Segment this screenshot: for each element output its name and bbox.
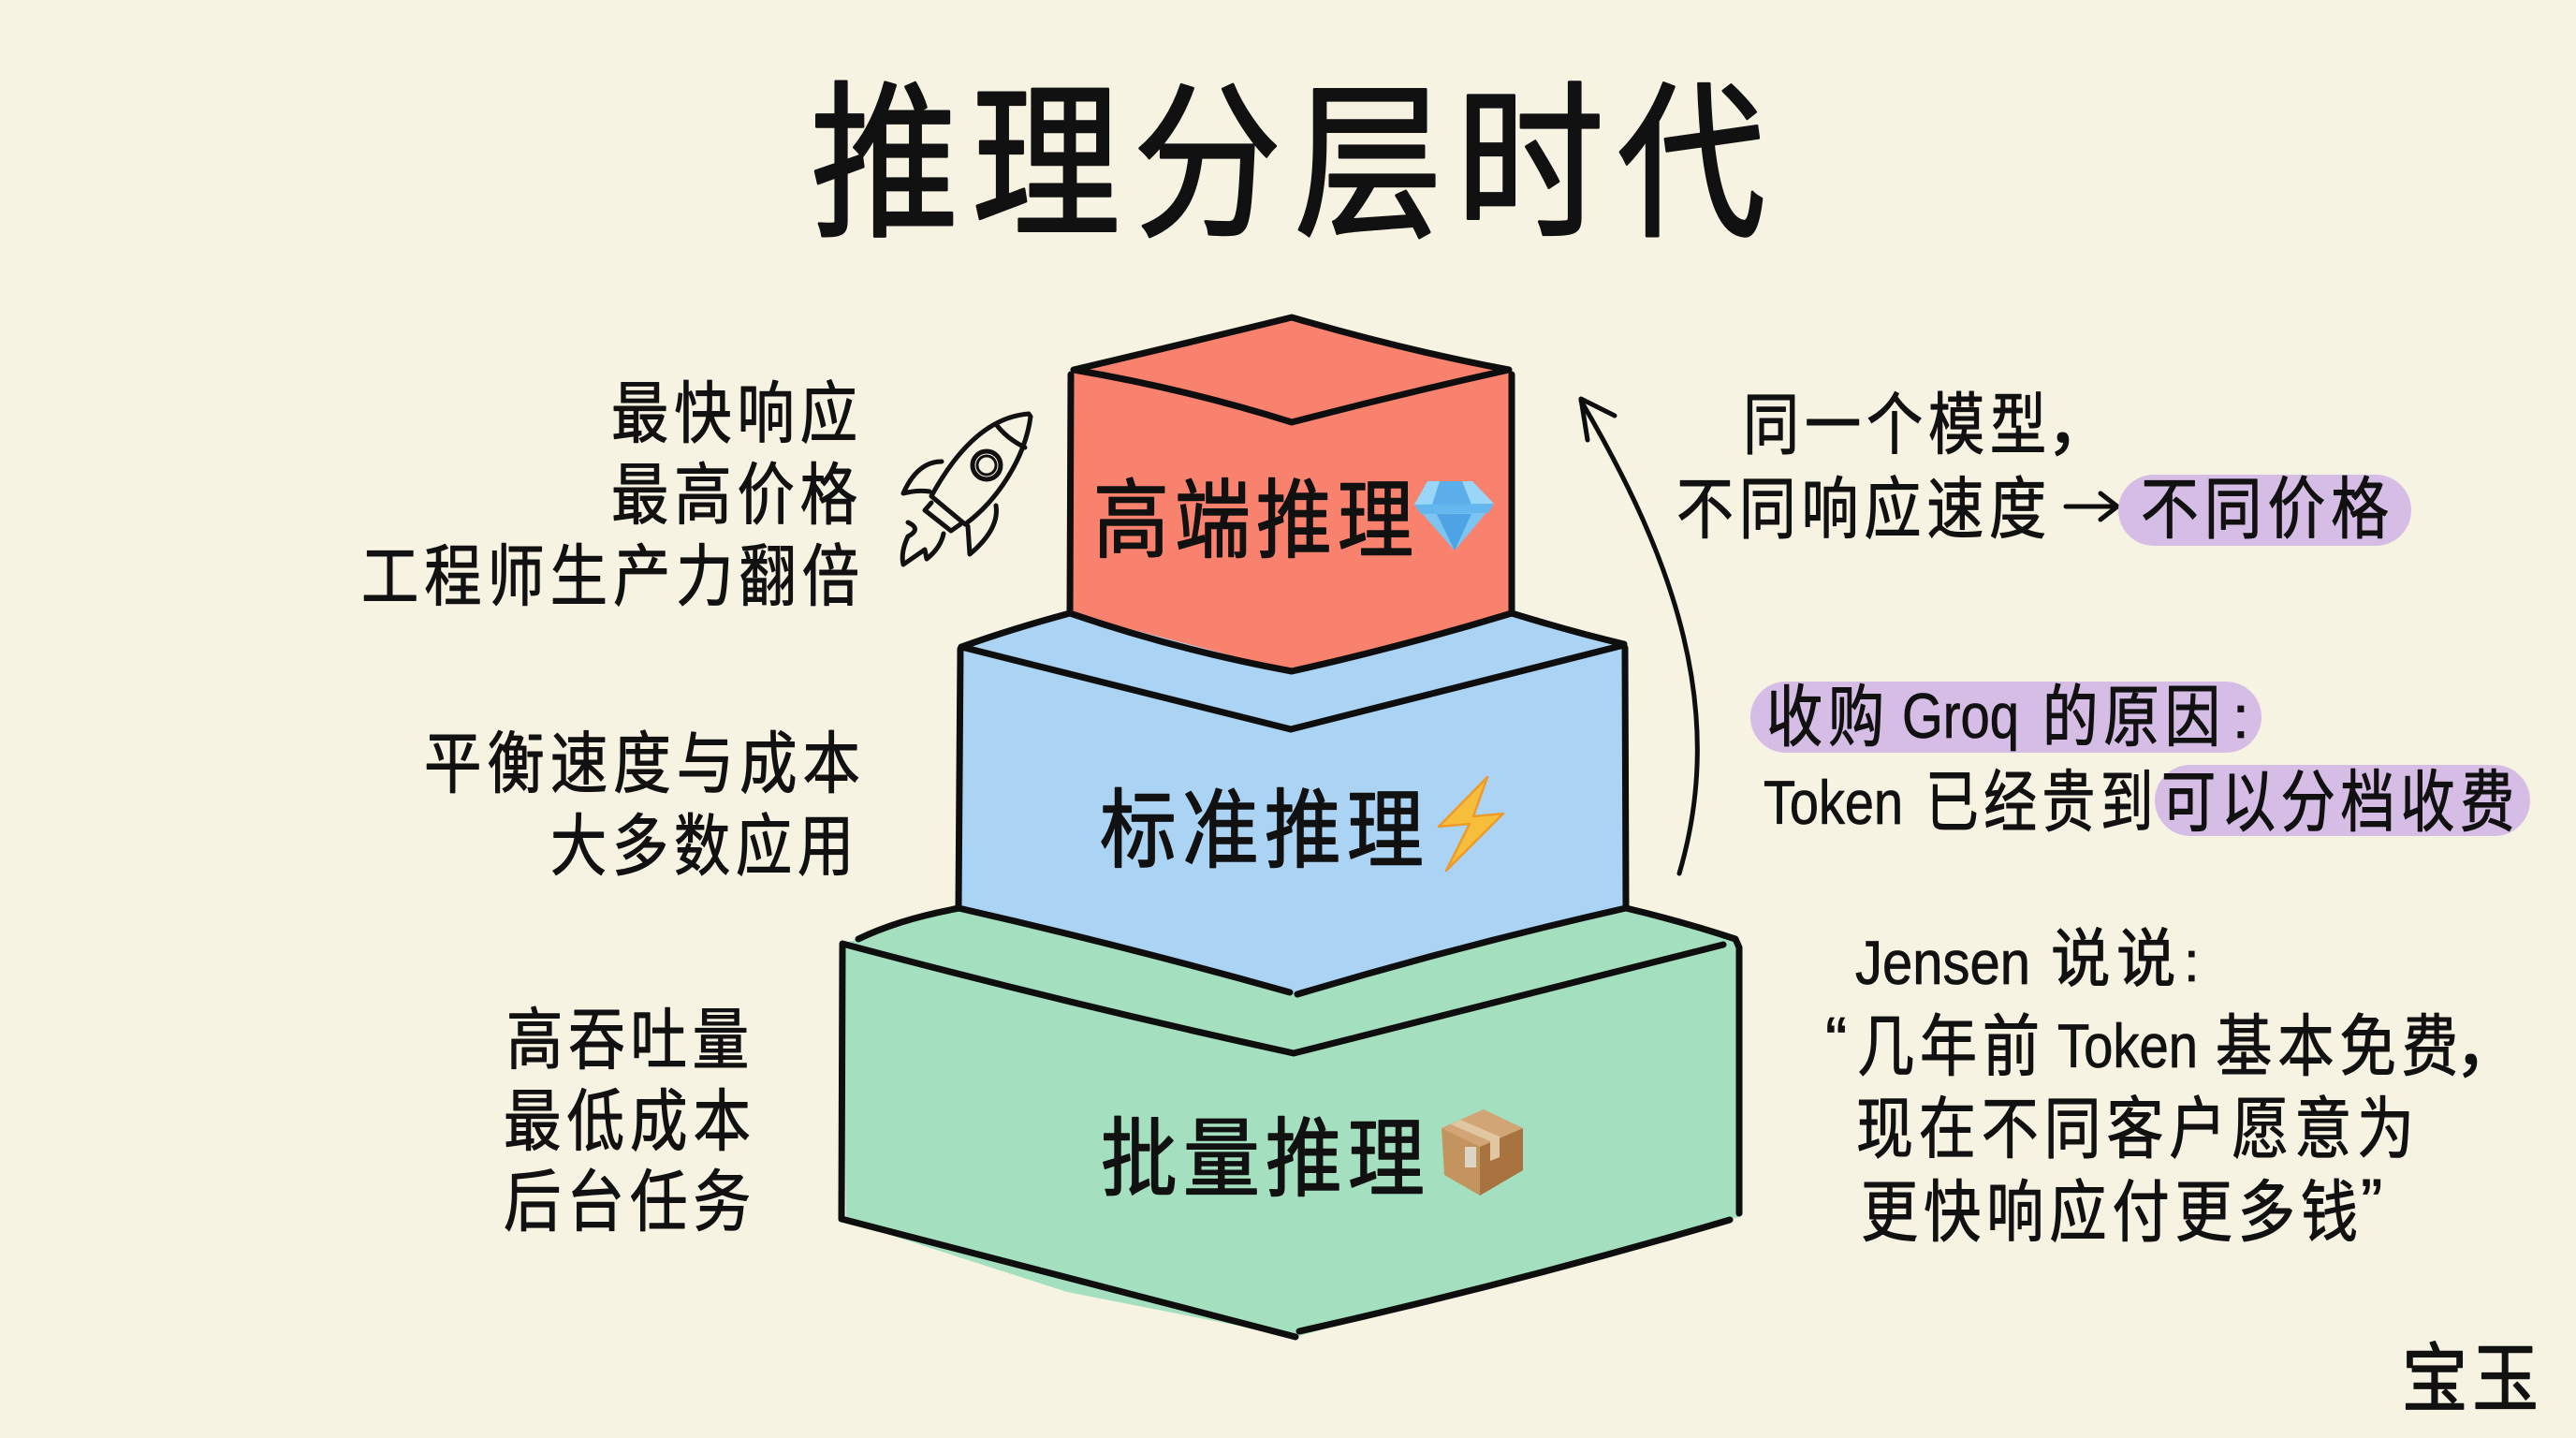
text: premium tier notes: 工程师生产力翻倍 (361, 521, 865, 620)
quote: Jensen says: 几年前 (1857, 991, 2045, 1090)
icon: diamond (1414, 481, 1494, 550)
quote: Jensen says: “ (1825, 1004, 1847, 1077)
highlight: acquisition reason: : (2232, 683, 2249, 751)
text: batch tier notes: 高吞吐量 (506, 985, 754, 1083)
callout: why acquire Groq (1750, 662, 2530, 845)
quote: Jensen says: 说说 (2051, 907, 2182, 1000)
text: standard tier notes (424, 709, 866, 889)
icon: lightning bolt (1439, 777, 1503, 871)
text: batch tier notes (504, 985, 756, 1245)
highlight: acquisition reason: 的原因 (2042, 662, 2226, 760)
callout: same model different price (1676, 370, 2411, 552)
title: 推理分层时代 (811, 27, 1778, 271)
text: batch tier notes: 后台任务 (504, 1147, 756, 1245)
callout: same model different price: 同一个模型 (1743, 370, 2052, 468)
tier: standard inference (blue) (959, 613, 1626, 994)
arrow: tiers rising (1581, 399, 1697, 873)
highlight: different price: 不同价格 (2141, 454, 2394, 552)
label: batch inference: 批量推理 (1101, 1090, 1430, 1214)
callout: same model different price: ， (2046, 370, 2120, 468)
tier: premium inference (red) (1070, 317, 1514, 671)
quote: Jensen says: 基本免费 (2216, 991, 2464, 1090)
text: premium tier notes (361, 359, 865, 620)
quote: Jensen says: ” (2361, 1166, 2382, 1239)
signature: 宝玉 (2402, 1319, 2543, 1428)
text: premium tier notes: 最快响应 (611, 359, 863, 457)
tier: batch inference (green) (842, 908, 1742, 1337)
icon: rocket (902, 414, 1031, 565)
quote: Jensen says: : (2184, 931, 2200, 993)
highlight: acquisition reason (1750, 662, 2261, 760)
arrow: leads to (2066, 493, 2117, 520)
callout: why acquire Groq: Token (1764, 768, 1903, 837)
text: standard tier notes: 平衡速度与成本 (424, 709, 866, 807)
quote: Jensen says: 现在不同客户愿意为 (1856, 1074, 2420, 1172)
label: premium inference: 高端推理 (1093, 451, 1419, 576)
pyramid diagram (842, 317, 1742, 1337)
quote: Jensen says: ， (2454, 991, 2528, 1090)
callout: why acquire Groq: 已经贵到 (1925, 747, 2159, 845)
text: premium tier notes: 最高价格 (611, 440, 863, 538)
quote: Jensen says (1825, 907, 2528, 1255)
label: standard inference: 标准推理 (1100, 761, 1429, 886)
text: standard tier notes: 大多数应用 (550, 791, 859, 889)
quote: Jensen says: Jensen (1855, 928, 2030, 997)
text: batch tier notes: 最低成本 (504, 1066, 756, 1165)
quote: Jensen says: 更快响应付更多钱 (1861, 1157, 2364, 1255)
quote: Jensen says: Token (2057, 1011, 2198, 1080)
highlight: acquisition reason: 收购 (1766, 662, 1890, 760)
icon: cardboard box (1442, 1109, 1523, 1196)
highlight: acquisition reason: Groq (1902, 681, 2019, 752)
callout: same model different price: 不同响应速度 (1676, 454, 2052, 552)
